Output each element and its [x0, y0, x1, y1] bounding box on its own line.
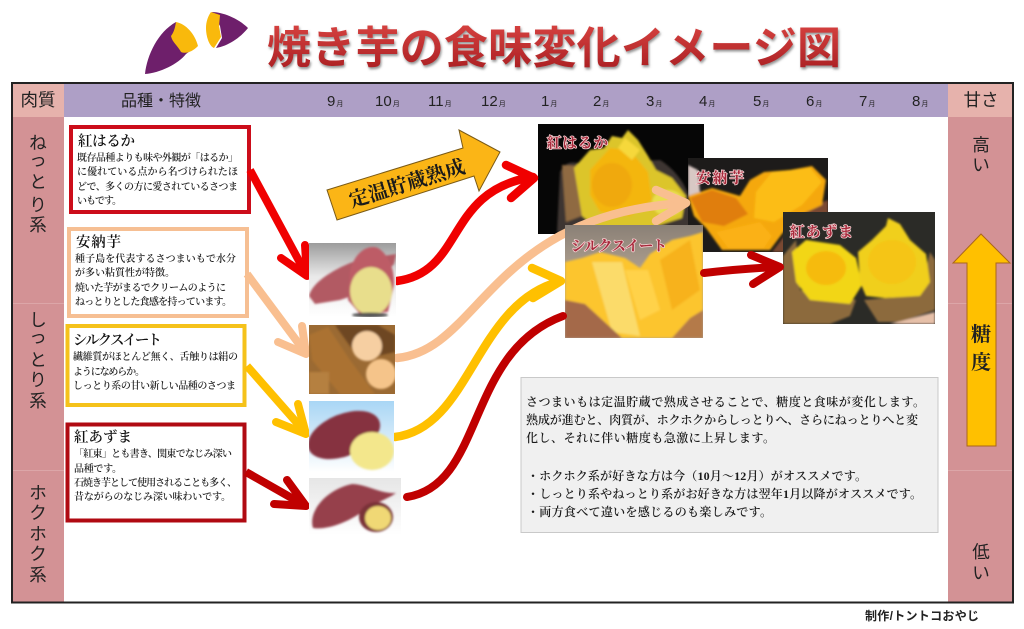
arrow: beni haruka to baked	[397, 165, 534, 281]
label: floury: ク	[29, 544, 47, 564]
photo: raw silk sweet	[301, 401, 394, 472]
panel: header bar	[64, 84, 948, 117]
label: floury: 系	[29, 565, 47, 585]
card body	[77, 151, 238, 207]
card body	[73, 350, 238, 392]
card body: 石焼き芋として使用されることも多く、	[74, 476, 237, 489]
arrow: sugar content up: 度	[971, 350, 991, 374]
card title: 紅はるか	[78, 133, 135, 150]
card body: 品種です。	[74, 462, 122, 475]
photo: raw annou imo	[309, 325, 396, 394]
label: moist: と	[29, 350, 47, 370]
photo: baked beni haruka	[538, 124, 704, 234]
recommendation list	[527, 468, 922, 519]
month axis: 1月	[541, 93, 557, 110]
panel: card annou imo	[69, 229, 247, 316]
arrow: storage ripening: 定温貯蔵熟成	[346, 155, 468, 212]
label: sticky: っ	[29, 150, 47, 170]
arrow: beni azuma card to photo	[246, 472, 306, 506]
heading: texture: 肉質	[20, 90, 56, 110]
recommendation list: ・両方食べて違いを感じるのも楽しみです。	[527, 504, 772, 519]
card body: しっとり系の甘い新しい品種のさつま	[73, 379, 236, 392]
label: annou imo: 安納芋	[696, 169, 744, 187]
arrow: annou imo to baked	[397, 190, 686, 358]
card body	[74, 252, 236, 308]
card body: 既存品種よりも味や外観が「はるか」	[77, 151, 238, 164]
month axis: 9月	[327, 93, 343, 110]
label: high	[972, 135, 990, 175]
panel: card beni azuma	[68, 424, 244, 520]
card body: 焼いた芋がまるでクリームのように	[74, 281, 226, 294]
month axis: 4月	[699, 93, 715, 110]
card title: 安納芋	[76, 233, 121, 251]
panel: card beni haruka	[71, 127, 249, 212]
card body: どで、多くの方に愛されているさつま	[77, 180, 238, 193]
month axis: 7月	[859, 93, 875, 110]
arrow: storage ripening	[327, 130, 500, 220]
arrow: silk sweet to baked	[395, 268, 561, 437]
label: beni azuma: 紅あずま	[790, 223, 853, 241]
card body: が多い粘質性が特徴。	[75, 266, 175, 279]
label: sticky: と	[29, 172, 47, 192]
photo: baked silk sweet	[565, 225, 703, 338]
arrow: annou imo card to photo	[247, 274, 306, 354]
title: 焼き芋の食味変化イメージ図	[267, 24, 841, 73]
card body: 「紅東」とも書き、関東でなじみ深い	[74, 447, 232, 460]
photo: baked beni azuma	[783, 212, 935, 324]
explanation text	[526, 394, 925, 445]
month axis: 12月	[481, 93, 506, 110]
label: high: 高	[972, 135, 990, 155]
photo: baked annou imo	[688, 158, 828, 252]
arrow: beni azuma to baked silk side	[407, 316, 563, 497]
label: sticky: 系	[29, 215, 47, 235]
label: sticky: り	[29, 195, 47, 215]
month axis: 6月	[806, 93, 822, 110]
label: floury: ホ	[29, 483, 47, 503]
arrow: sugar content up: 糖	[971, 323, 991, 346]
card body	[74, 447, 237, 503]
label: sticky	[29, 133, 47, 235]
label: low: い	[972, 563, 990, 583]
photo: raw beni haruka	[309, 243, 396, 318]
label: moist	[29, 310, 47, 411]
card body: いもです。	[77, 195, 122, 207]
label: moist: っ	[29, 327, 47, 347]
explanation text: 熟成が進むと、肉質が、ホクホクからしっとりへ、さらにねっとりへと変	[526, 412, 919, 427]
card body: 種子島を代表するさつまいもで水分	[75, 252, 236, 265]
panel: explanation	[521, 378, 938, 532]
arrow: beni azuma to baked	[704, 255, 780, 284]
arrow: beni haruka card to photo	[250, 170, 307, 276]
month axis: 2月	[593, 93, 609, 110]
month axis: 5月	[753, 93, 769, 110]
card body: ねっとりとした食感を持っています。	[75, 295, 232, 308]
month axis: 8月	[912, 93, 928, 110]
label: floury	[29, 483, 47, 585]
arrow: silk sweet card to photo	[247, 366, 306, 434]
recommendation list: ・しっとり系やねっとり系がお好きな方は翌年1月以降がオススメです。	[527, 486, 922, 501]
label: moist: し	[29, 310, 47, 330]
label: high: い	[972, 155, 990, 175]
card body: 昔ながらのなじみ深い味わいです。	[74, 490, 231, 503]
label: low: 低	[972, 542, 990, 562]
labels on baked photos	[547, 135, 853, 255]
panel: card silk sweet	[68, 326, 244, 405]
icon: baked sweet potato	[145, 12, 248, 74]
card body: ようになめらか。	[73, 366, 145, 378]
arrow: sugar content up	[953, 234, 1010, 446]
photo: raw beni azuma	[309, 478, 401, 535]
card title: シルクスイート	[73, 332, 162, 349]
month axis	[327, 93, 928, 110]
label: floury: ク	[29, 503, 47, 523]
month axis: 3月	[646, 93, 662, 110]
heading: variety and features: 品種・特徴	[121, 92, 201, 110]
month axis: 10月	[375, 93, 400, 110]
card title: 紅あずま	[74, 429, 132, 446]
card body: 繊維質がほとんど無く、舌触りは絹の	[73, 350, 238, 363]
label: sticky: ね	[29, 133, 47, 153]
month axis: 11月	[428, 93, 452, 110]
label: moist: り	[29, 370, 47, 390]
label: floury: ホ	[29, 524, 47, 544]
label: beni haruka: 紅はるか	[547, 135, 608, 152]
label: silk sweet: シルクスイート	[571, 238, 667, 255]
panel: sweetness column	[948, 84, 1012, 602]
credit: 制作/トントコおやじ	[865, 608, 979, 623]
label: low	[972, 542, 990, 583]
explanation text: 化し、それに伴い糖度も急激に上昇します。	[526, 430, 775, 445]
recommendation list: ・ホクホク系が好きな方は今（10月～12月）がオススメです。	[527, 468, 867, 483]
label: moist: 系	[29, 391, 47, 411]
heading: sweetness: 甘さ	[964, 90, 998, 110]
card body: に優れている点から名づけられたほ	[77, 165, 238, 178]
panel: texture column	[13, 84, 64, 602]
explanation text: さつまいもは定温貯蔵で熟成させることで、糖度と食味が変化します。	[526, 394, 925, 409]
